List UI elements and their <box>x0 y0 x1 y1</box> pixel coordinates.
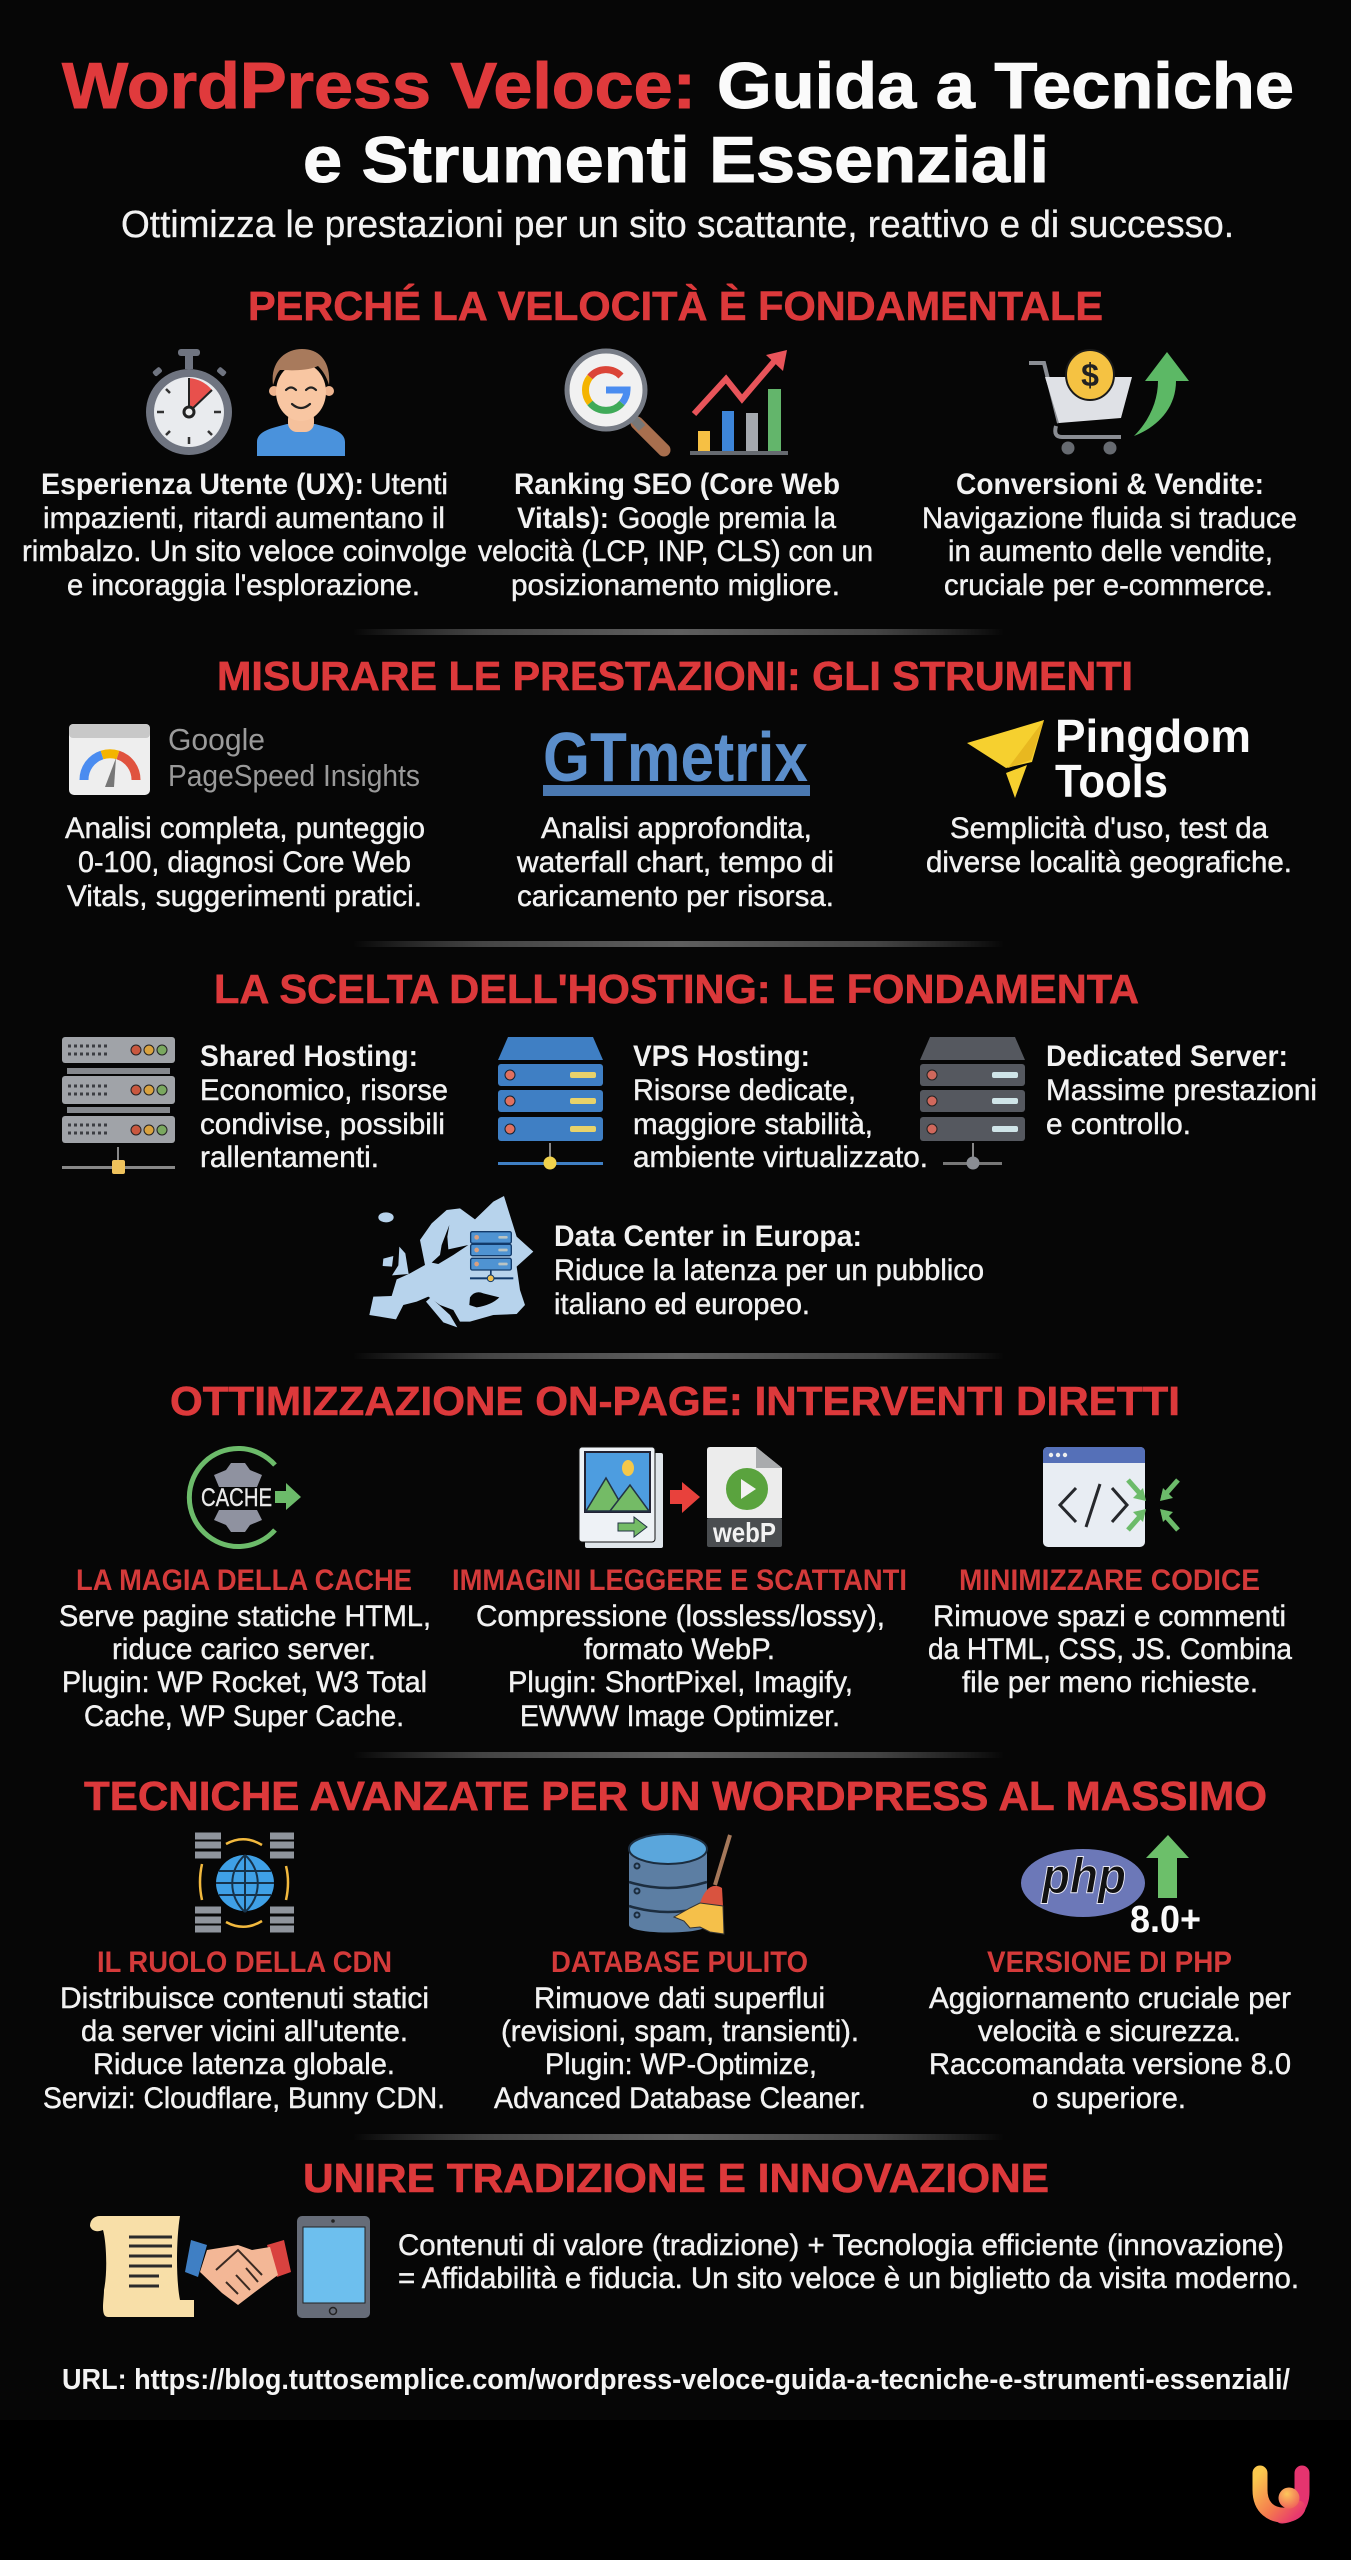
text: data center in europa <box>554 1220 984 1321</box>
icon: shared server <box>62 1037 175 1174</box>
text: dedicated server: Dedicated Server: <box>1046 1040 1288 1073</box>
column: minimizzare codice: Rimuove spazi e commenti <box>933 1600 1286 1633</box>
title: e Strumenti Essenziali <box>303 123 1049 196</box>
icon: cache <box>189 1448 301 1546</box>
icon: cdn globe <box>195 1836 294 1929</box>
section: perché la velocità è fondamentale <box>22 283 1297 602</box>
heading: OTTIMIZZAZIONE ON-PAGE: INTERVENTI DIRETTI <box>170 1378 1180 1424</box>
icon: tablet <box>297 2216 370 2318</box>
column: la magia della cache: Cache, WP Super Cache. <box>84 1700 404 1733</box>
column: immagini leggere: EWWW Image Optimizer. <box>520 1700 840 1733</box>
column: immagini leggere <box>452 1564 907 1733</box>
column: esperienza utente: Utenti <box>370 468 448 501</box>
column: ranking seo: Vitals): <box>517 502 609 535</box>
column: esperienza utente: e incoraggia l'esplorazione. <box>67 569 420 602</box>
logo: Google PageSpeed Insights: Google <box>168 722 265 757</box>
column: ranking seo <box>478 468 873 602</box>
source url: URL: https://blog.tuttosemplice.com/wordpress-veloce-guida-a-tecniche-e-strumenti-essenziali/ <box>62 2364 1290 2396</box>
column: la magia della cache: Plugin: WP Rocket, W3 Total <box>62 1666 427 1699</box>
text: vps hosting <box>633 1040 928 1174</box>
column: il ruolo della cdn <box>43 1946 445 2115</box>
column: il ruolo della cdn: da server vicini all'utente. <box>81 2015 408 2048</box>
column: versione di php <box>929 1946 1291 2115</box>
icon: europe map with server <box>369 1196 533 1327</box>
icon: php 8.0+: php <box>1040 1848 1126 1904</box>
column: la magia della cache: Serve pagine statiche HTML, <box>59 1600 431 1633</box>
column: database pulito: (revisioni, spam, transienti). <box>501 2015 859 2048</box>
icon: cart with coin and arrow <box>1029 350 1189 454</box>
logo: Pingdom Tools: Tools <box>1055 755 1168 807</box>
logo: GTmetrix: GTmetrix <box>543 718 808 796</box>
column: versione di php: o superiore. <box>1032 2082 1186 2115</box>
icon: minified code <box>1043 1447 1178 1547</box>
logo: Google PageSpeed Insights: PageSpeed Insights <box>168 758 420 793</box>
column: gtmetrix text <box>516 812 834 913</box>
text: data center in europa: Data Center in Europa: <box>554 1220 862 1253</box>
section: tecniche avanzate <box>43 1773 1291 2115</box>
section: misurare le prestazioni <box>65 653 1292 913</box>
text: shared hosting: Economico, risorse <box>200 1074 448 1107</box>
column: minimizzare codice: MINIMIZZARE CODICE <box>959 1564 1260 1597</box>
column: immagini leggere: formato WebP. <box>584 1633 775 1666</box>
column: la magia della cache: riduce carico server. <box>112 1633 376 1666</box>
text: dedicated server: Massime prestazioni <box>1046 1074 1317 1107</box>
column: database pulito <box>494 1946 866 2115</box>
column: il ruolo della cdn: Distribuisce contenuti statici <box>60 1982 429 2015</box>
column: esperienza utente <box>22 468 467 602</box>
column: gtmetrix text: Analisi approfondita, <box>541 812 812 845</box>
column: pagespeed text: 0-100, diagnosi Core Web <box>78 846 411 879</box>
text: tradizione e innovazione: = Affidabilità e fiducia. Un sito veloce è un biglietto da visita moderno. <box>398 2262 1299 2295</box>
column: ranking seo: velocità (LCP, INP, CLS) con un <box>478 535 873 568</box>
heading: PERCHÉ LA VELOCITÀ È FONDAMENTALE <box>248 283 1103 329</box>
heading: MISURARE LE PRESTAZIONI: GLI STRUMENTI <box>217 653 1133 699</box>
logo: Google PageSpeed Insights <box>69 722 420 795</box>
heading: TECNICHE AVANZATE PER UN WORDPRESS AL MASSIMO <box>84 1773 1267 1819</box>
column: versione di php: Raccomandata versione 8.0 <box>929 2048 1291 2081</box>
column: pingdom text <box>926 812 1292 879</box>
icon: image to webp: webP <box>712 1517 776 1548</box>
text: data center in europa: italiano ed europeo. <box>554 1288 810 1321</box>
icon: cache: CACHE <box>201 1484 272 1512</box>
column: minimizzare codice: file per meno richieste. <box>962 1666 1258 1699</box>
text: shared hosting <box>200 1040 448 1174</box>
text: shared hosting: rallentamenti. <box>200 1141 379 1174</box>
section: unire tradizione e innovazione <box>90 2155 1299 2318</box>
icon: smiling user <box>257 349 345 456</box>
column: immagini leggere: IMMAGINI LEGGERE E SCATTANTI <box>452 1564 907 1597</box>
icon: php 8.0+ <box>1021 1835 1201 1941</box>
column: pingdom text: diverse località geografiche. <box>926 846 1292 879</box>
column: pagespeed text <box>65 812 425 913</box>
column: conversioni e vendite: cruciale per e-commerce. <box>944 569 1273 602</box>
text: vps hosting: VPS Hosting: <box>633 1040 810 1073</box>
column: immagini leggere: Plugin: ShortPixel, Imagify, <box>508 1666 853 1699</box>
text: tradizione e innovazione: Contenuti di valore (tradizione) + Tecnologia efficiente (innovazione) <box>398 2229 1284 2262</box>
text: tradizione e innovazione <box>398 2229 1299 2295</box>
column: database pulito: DATABASE PULITO <box>551 1946 808 1979</box>
column: database pulito: Advanced Database Cleaner. <box>494 2082 866 2115</box>
icon: dedicated server <box>920 1037 1025 1170</box>
column: immagini leggere: Compressione (lossless/lossy), <box>476 1600 885 1633</box>
title: WordPress Veloce: <box>62 49 696 122</box>
column: conversioni e vendite <box>922 468 1297 602</box>
column: il ruolo della cdn: IL RUOLO DELLA CDN <box>97 1946 392 1979</box>
column: il ruolo della cdn: Riduce latenza globale. <box>93 2048 395 2081</box>
text: data center in europa: Riduce la latenza per un pubblico <box>554 1254 984 1287</box>
icon: scroll <box>90 2216 194 2317</box>
column: pagespeed text: Analisi completa, punteggio <box>65 812 425 845</box>
column: pingdom text: Semplicità d'uso, test da <box>950 812 1268 845</box>
text: vps hosting: Risorse dedicate, <box>633 1074 856 1107</box>
logo: Pingdom Tools: Pingdom <box>1055 710 1251 762</box>
heading: UNIRE TRADIZIONE E INNOVAZIONE <box>303 2155 1049 2201</box>
column: la magia della cache: LA MAGIA DELLA CACHE <box>76 1564 412 1597</box>
icon: cart with coin and arrow: $ <box>1081 357 1099 393</box>
column: minimizzare codice: da HTML, CSS, JS. Combina <box>928 1633 1292 1666</box>
column: database pulito: Plugin: WP-Optimize, <box>545 2048 817 2081</box>
column: ranking seo: Ranking SEO (Core Web <box>514 468 840 501</box>
column: ranking seo: posizionamento migliore. <box>511 569 840 602</box>
icon: growth chart <box>690 350 788 455</box>
section: ottimizzazione on-page <box>59 1378 1292 1733</box>
column: esperienza utente: rimbalzo. Un sito veloce coinvolge <box>22 535 467 568</box>
icon: magnifier with G <box>567 351 664 450</box>
icon: image to webp <box>579 1447 782 1548</box>
logo: Pingdom Tools <box>967 710 1251 807</box>
column: gtmetrix text: waterfall chart, tempo di <box>516 846 834 879</box>
column: esperienza utente: Esperienza Utente (UX): <box>41 468 364 501</box>
column: minimizzare codice <box>928 1564 1292 1699</box>
column: ranking seo: Google premia la <box>618 502 836 535</box>
column: versione di php: velocità e sicurezza. <box>978 2015 1241 2048</box>
column: versione di php: Aggiornamento cruciale per <box>929 1982 1291 2015</box>
text: dedicated server: e controllo. <box>1046 1108 1191 1141</box>
column: la magia della cache <box>59 1564 431 1733</box>
heading: LA SCELTA DELL'HOSTING: LE FONDAMENTA <box>214 966 1139 1012</box>
icon: vps server <box>498 1037 603 1170</box>
text: vps hosting: maggiore stabilità, <box>633 1108 873 1141</box>
title <box>62 49 1294 196</box>
subtitle: Ottimizza le prestazioni per un sito scattante, reattivo e di successo. <box>121 204 1234 246</box>
icon: stopwatch <box>146 349 232 455</box>
column: esperienza utente: impazienti, ritardi aumentano il <box>43 502 445 535</box>
column: il ruolo della cdn: Servizi: Cloudflare, Bunny CDN. <box>43 2082 445 2115</box>
column: database pulito: Rimuove dati superflui <box>534 1982 825 2015</box>
text: shared hosting: condivise, possibili <box>200 1108 445 1141</box>
column: gtmetrix text: caricamento per risorsa. <box>517 880 834 913</box>
column: conversioni e vendite: Navigazione fluida si traduce <box>922 502 1297 535</box>
icon: database and broom <box>629 1834 730 1934</box>
section: la scelta dell'hosting <box>62 966 1317 1327</box>
title: Guida a Tecniche <box>717 49 1294 122</box>
column: conversioni e vendite: in aumento delle vendite, <box>948 535 1273 568</box>
column: pagespeed text: Vitals, suggerimenti pratici. <box>67 880 422 913</box>
icon: handshake <box>185 2240 291 2305</box>
text: shared hosting: Shared Hosting: <box>200 1040 418 1073</box>
column: versione di php: VERSIONE DI PHP <box>987 1946 1232 1979</box>
column: conversioni e vendite: Conversioni & Vendite: <box>956 468 1264 501</box>
text: vps hosting: ambiente virtualizzato. <box>633 1141 928 1174</box>
text: dedicated server <box>1046 1040 1317 1141</box>
logo: tuttosemplice <box>1260 2473 1302 2516</box>
icon: php 8.0+: 8.0+ <box>1130 1899 1201 1941</box>
